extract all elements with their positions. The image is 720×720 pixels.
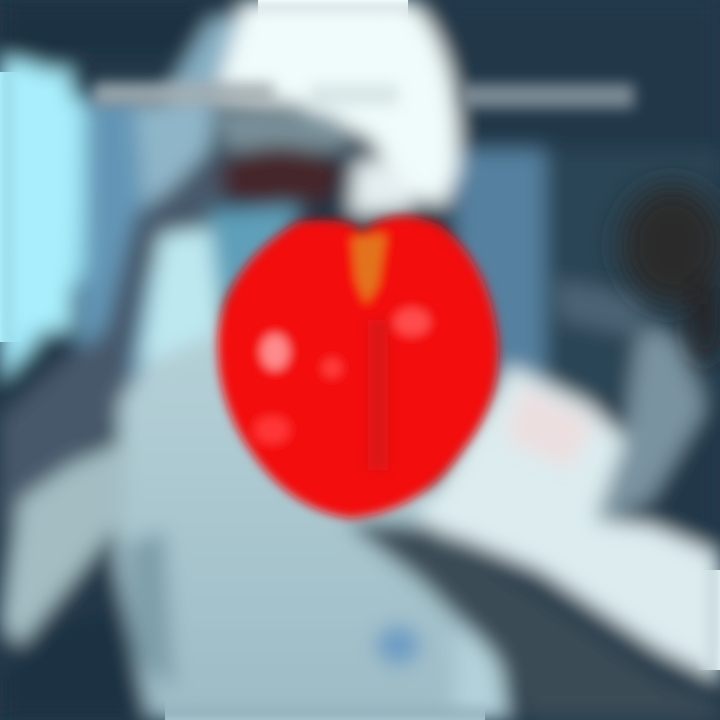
face [218, 146, 342, 210]
dark figure at right [620, 185, 720, 365]
fruit highlights [254, 308, 430, 470]
white glove and sleeve [415, 365, 720, 680]
red fruit [218, 216, 498, 518]
raised dark arm [0, 148, 240, 535]
title [94, 82, 634, 108]
dark diagonal sleeve band [345, 522, 720, 720]
bottom-left shadow [0, 610, 130, 720]
blue streak beside hood [135, 15, 245, 215]
window light [0, 58, 85, 380]
face mask [208, 205, 300, 295]
fruit stem [352, 234, 386, 304]
white hood [215, 0, 458, 215]
right arm [555, 280, 705, 530]
body coat [0, 225, 510, 720]
